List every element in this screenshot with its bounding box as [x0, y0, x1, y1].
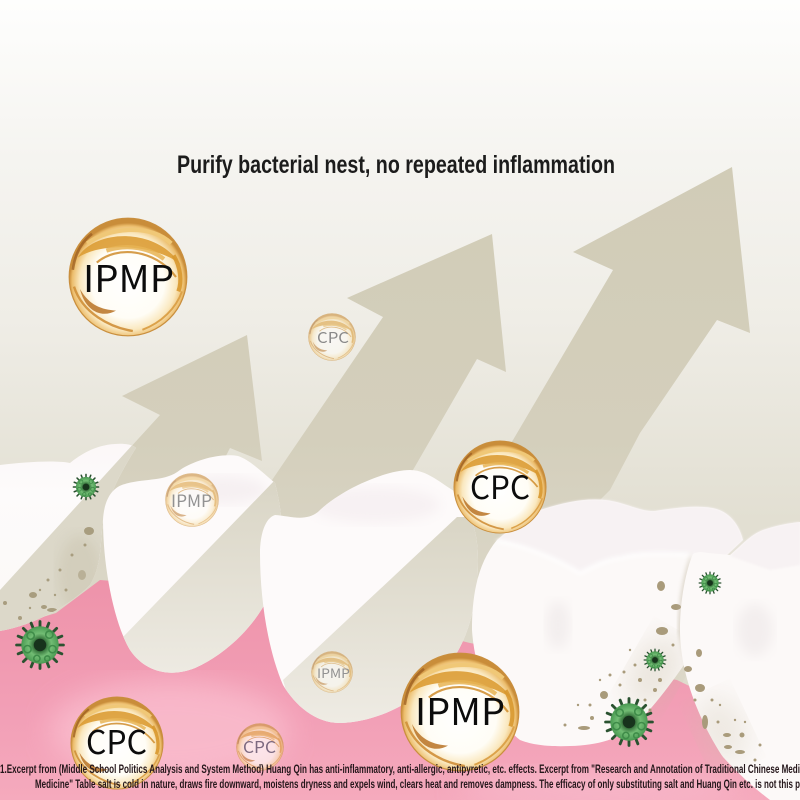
tooth 1	[0, 444, 136, 631]
sphere: CPC small bottom: CPC	[243, 734, 276, 758]
virus 1	[73, 474, 99, 500]
sphere: CPC large right: CPC	[470, 463, 530, 509]
sphere: IPMP large bottom	[401, 653, 519, 771]
sphere: IPMP large bottom: IPMP	[415, 682, 505, 736]
virus 2	[17, 622, 63, 668]
sphere: CPC small bottom	[236, 723, 284, 771]
sphere: CPC small upper	[308, 313, 356, 361]
tooth 3	[260, 470, 478, 723]
sphere: CPC small upper: CPC	[317, 327, 349, 348]
sphere: IPMP top left: IPMP	[83, 249, 174, 303]
arrow: middle	[100, 234, 506, 730]
tooth 4	[472, 499, 743, 746]
sphere: CPC large bottom left	[71, 697, 163, 789]
arrow overlay on tooth 3	[283, 517, 478, 723]
arrow overlay on tooth 2	[124, 482, 281, 673]
plaque on tooth 5	[684, 649, 762, 762]
title: Purify bacterial nest, no repeated inflammation	[177, 151, 615, 179]
sphere: IPMP on tooth 2: IPMP	[171, 487, 212, 512]
sphere: IPMP on tooth 3: IPMP	[317, 663, 350, 682]
virus 4	[699, 572, 721, 594]
arrow overlay on tooth 1	[0, 441, 140, 640]
virus 5	[644, 649, 666, 671]
sphere: IPMP on tooth 2	[166, 474, 218, 526]
sphere: IPMP on tooth 3	[311, 651, 353, 693]
arrow: right	[283, 167, 750, 740]
footnote	[0, 764, 800, 791]
plaque on tooth 1	[3, 527, 94, 620]
plaque on tooth 4	[564, 581, 681, 730]
sphere: CPC large bottom left: CPC	[86, 716, 147, 764]
sphere: IPMP top left	[69, 218, 187, 336]
tooth 5	[678, 522, 800, 800]
sphere: CPC large right	[454, 441, 546, 533]
virus 3	[606, 699, 652, 745]
arrow: left	[0, 335, 262, 700]
gums	[0, 580, 800, 800]
tooth 2	[103, 455, 281, 673]
